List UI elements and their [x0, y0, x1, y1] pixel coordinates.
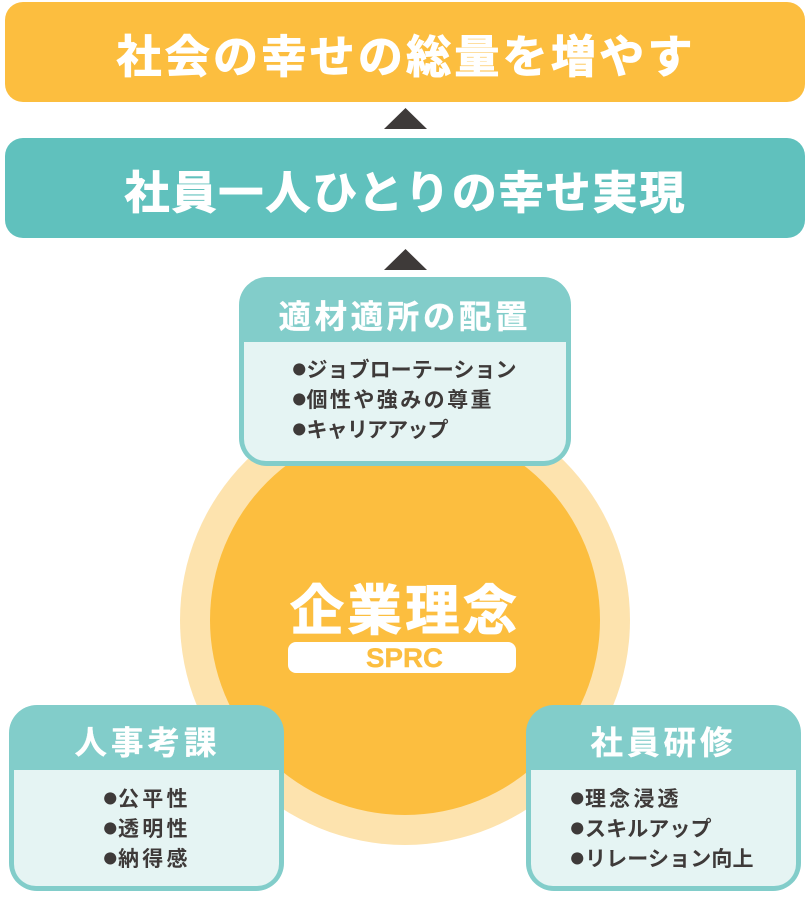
- list: personnel evaluation items: 納得感: [118, 847, 188, 871]
- list: employee training items: [570, 788, 754, 871]
- list: employee training items: 理念浸透: [585, 788, 678, 811]
- list: right placement items: [292, 358, 516, 442]
- label: SPRC: SPRC: [366, 643, 443, 673]
- panel: right placement: [239, 277, 571, 466]
- list: personnel evaluation items: 公平性: [118, 788, 188, 811]
- heading: personnel evaluation: 人事考課: [74, 725, 216, 761]
- arrow: up to employee happiness: [384, 249, 427, 270]
- list: personnel evaluation items: [104, 788, 188, 871]
- list: personnel evaluation items: ●: [104, 788, 117, 808]
- list: personnel evaluation items: ●: [104, 818, 117, 838]
- heading: employee training: 社員研修: [590, 725, 733, 761]
- arrow: up to goal: [384, 108, 427, 129]
- list: right placement items: キャリアアップ: [306, 419, 448, 442]
- circle: corporate philosophy: [180, 395, 630, 845]
- banner: goal: 社会の幸せの総量を増やす: [116, 32, 692, 82]
- heading: corporate philosophy: 企業理念: [290, 582, 517, 642]
- list: right placement items: ●: [292, 388, 306, 408]
- list: personnel evaluation items: ●: [104, 848, 117, 868]
- list: employee training items: スキルアップ: [585, 818, 712, 841]
- list: employee training items: ●: [570, 818, 584, 838]
- list: right placement items: ●: [292, 418, 306, 438]
- list: personnel evaluation items: 透明性: [118, 818, 188, 841]
- list: employee training items: ●: [570, 848, 584, 868]
- banner: employee happiness: [5, 138, 805, 238]
- list: right placement items: ジョブローテーション: [306, 358, 516, 382]
- list: employee training items: ●: [570, 788, 584, 808]
- heading: right placement: 適材適所の配置: [278, 299, 528, 335]
- banner: goal: [5, 2, 805, 102]
- list: employee training items: リレーション向上: [585, 848, 754, 871]
- list: right placement items: 個性や強みの尊重: [306, 388, 492, 412]
- panel: personnel evaluation: [9, 705, 284, 891]
- panel: employee training: [526, 705, 801, 891]
- banner: employee happiness: 社員一人ひとりの幸せ実現: [124, 168, 684, 218]
- list: right placement items: ●: [292, 358, 306, 378]
- label: SPRC: [288, 642, 516, 673]
